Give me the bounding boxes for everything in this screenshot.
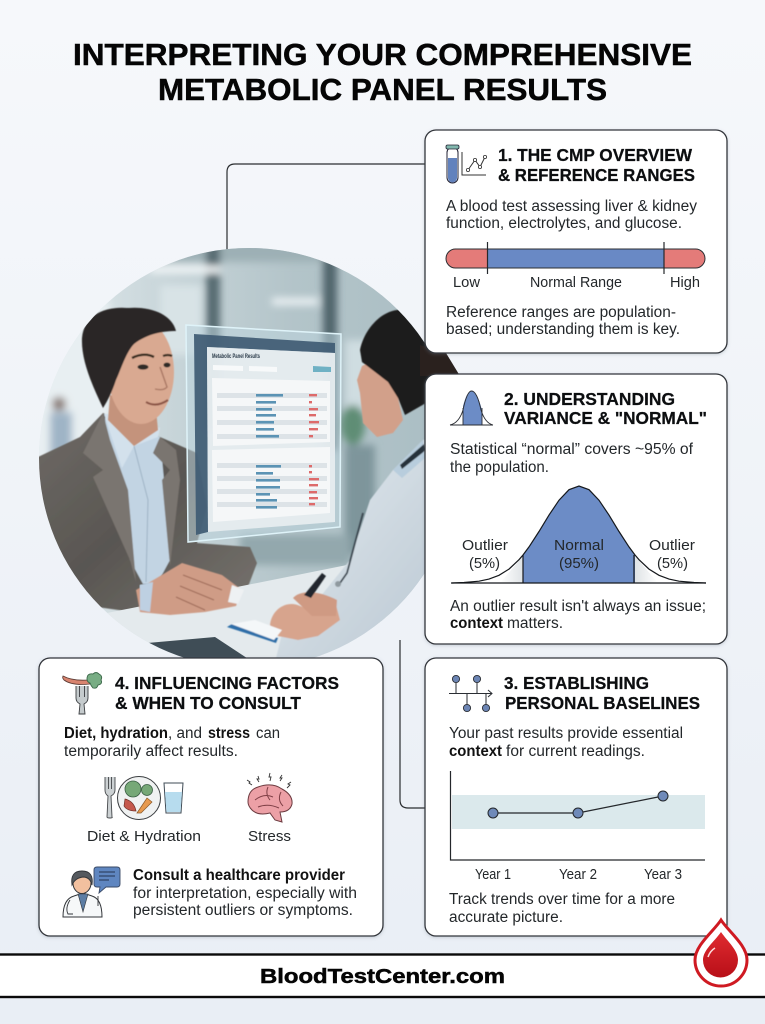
icon: diet and hydration xyxy=(105,776,183,820)
icon: stressed brain xyxy=(247,773,292,822)
consult text: for interpretation, especially with xyxy=(133,885,357,902)
range bar: High xyxy=(670,275,700,291)
icon: fork with food xyxy=(63,672,102,714)
intro text: A blood test assessing liver & kidney xyxy=(446,198,697,215)
note text: context xyxy=(450,615,503,632)
consult text xyxy=(133,867,357,919)
doctor ponytail beyond the photo edge xyxy=(420,345,460,376)
bell curve chart: Outlier xyxy=(649,538,695,554)
icon: timeline xyxy=(449,675,492,712)
heading xyxy=(115,673,339,713)
heading: 1. THE CMP OVERVIEW xyxy=(498,145,692,165)
doctor xyxy=(226,309,428,658)
intro text: the population. xyxy=(450,459,549,476)
heading: 3. ESTABLISHING xyxy=(504,673,649,693)
intro text: for current readings. xyxy=(506,743,645,760)
bell curve chart: Outlier xyxy=(462,538,508,554)
heading xyxy=(498,145,695,185)
connector: baselines card to photo xyxy=(400,640,425,808)
intro text: stress xyxy=(208,725,250,742)
bell curve chart xyxy=(451,486,706,583)
line chart: three-year trend: Year 2 xyxy=(559,867,597,883)
intro text: can xyxy=(256,725,280,742)
note text xyxy=(449,891,675,926)
intro text: function, electrolytes, and glucose. xyxy=(446,215,682,232)
intro text: Diet, hydration xyxy=(64,725,168,742)
note text: matters. xyxy=(507,615,563,632)
note text xyxy=(446,304,680,338)
icon labels: Diet & Hydration xyxy=(87,829,201,845)
icon labels: Stress xyxy=(248,829,291,845)
title xyxy=(73,37,692,107)
connector: overview card to photo xyxy=(227,164,425,250)
intro text: , and xyxy=(168,725,202,742)
range bar: Low xyxy=(453,275,481,291)
intro text: context xyxy=(449,743,502,760)
range bar: Normal Range xyxy=(530,275,622,291)
note text: Reference ranges are population- xyxy=(446,304,676,321)
man: suit xyxy=(32,413,257,613)
bell curve chart: Normal xyxy=(554,538,604,554)
heading: VARIANCE & "NORMAL" xyxy=(504,408,707,428)
icon: test tube and line chart xyxy=(446,145,487,183)
range bar xyxy=(446,242,705,291)
icon: doctor with speech bubble xyxy=(63,867,120,917)
intro text xyxy=(64,725,280,760)
icon: small bell curve xyxy=(450,391,493,425)
panel 3: personal baselines xyxy=(425,658,727,936)
line chart: three-year trend: Year 1 xyxy=(475,867,511,883)
table xyxy=(108,565,346,658)
consult text: Consult a healthcare provider xyxy=(133,867,345,884)
intro text: temporarily affect results. xyxy=(64,743,238,760)
heading: 4. INFLUENCING FACTORS xyxy=(115,673,339,693)
heading: & WHEN TO CONSULT xyxy=(115,693,301,713)
line chart: three-year trend: Year 3 xyxy=(644,867,682,883)
heading: & REFERENCE RANGES xyxy=(498,165,695,185)
bell curve chart: (5%) xyxy=(469,556,500,572)
intro text xyxy=(446,198,697,232)
intro text xyxy=(449,725,683,760)
note text: Track trends over time for a more xyxy=(449,891,675,908)
panel 1: CMP overview and reference ranges xyxy=(425,130,727,353)
icon: blood drop logo xyxy=(695,920,747,986)
icon labels xyxy=(87,829,291,845)
footer band: BloodTestCenter.com xyxy=(260,966,505,988)
heading: PERSONAL BASELINES xyxy=(505,693,700,713)
panel 4: influencing factors and when to consult xyxy=(39,658,383,936)
photo: patient and doctor reviewing results xyxy=(39,248,428,658)
consult text: persistent outliers or symptoms. xyxy=(133,902,353,919)
bell curve chart: (5%) xyxy=(657,556,688,572)
heading xyxy=(504,673,700,713)
heading: 2. UNDERSTANDING xyxy=(504,389,675,409)
heading xyxy=(504,389,707,428)
line chart: three-year trend xyxy=(450,771,705,883)
glass results panel xyxy=(186,325,341,542)
clinic background xyxy=(39,248,424,657)
footer band xyxy=(0,954,765,997)
man: head xyxy=(82,308,176,446)
note text xyxy=(450,598,706,632)
note text: An outlier result isn't always an issue; xyxy=(450,598,706,615)
intro text: Statistical “normal” covers ~95% of xyxy=(450,441,694,458)
glass results panel: Metabolic Panel Results xyxy=(212,354,260,360)
title: METABOLIC PANEL RESULTS xyxy=(158,72,607,107)
man: hands xyxy=(136,563,244,615)
intro text xyxy=(450,441,694,476)
intro text: Your past results provide essential xyxy=(449,725,683,742)
panel 2: variance and normal xyxy=(425,374,727,644)
note text: based; understanding them is key. xyxy=(446,321,680,338)
title: INTERPRETING YOUR COMPREHENSIVE xyxy=(73,37,692,72)
note text: accurate picture. xyxy=(449,909,563,926)
bell curve chart: (95%) xyxy=(559,556,599,572)
